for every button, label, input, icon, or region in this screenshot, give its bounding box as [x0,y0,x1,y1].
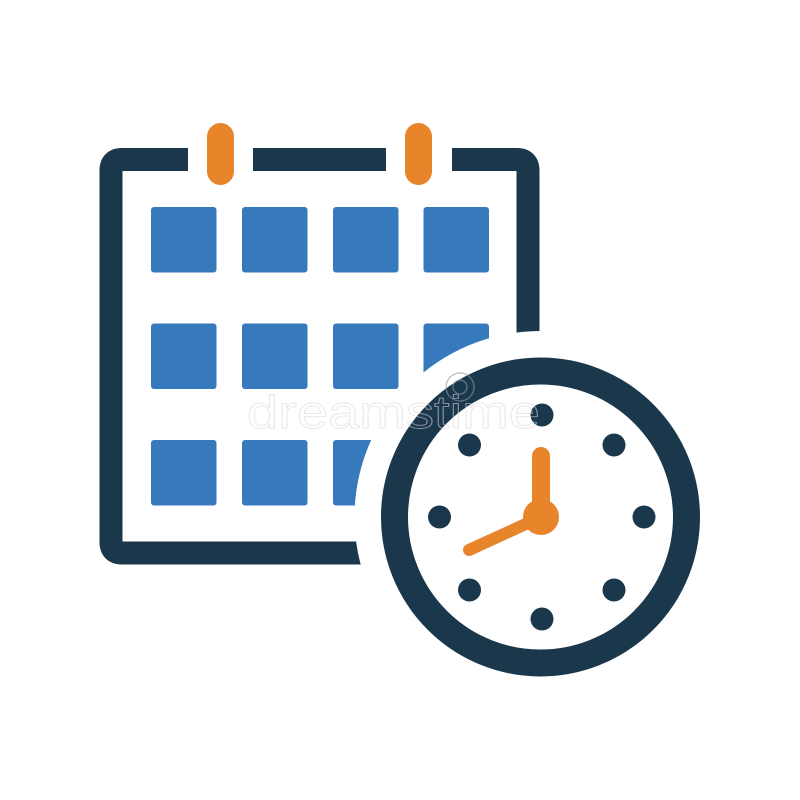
clock cutout [354,331,726,703]
icon: calendar binder rings [207,123,432,185]
calendar day grid [151,207,489,506]
clock hour markers [428,404,656,630]
watermark [247,373,540,438]
clock hands [469,456,559,550]
icon: calendar frame [111,160,528,553]
watermark: dreamstime [247,386,540,438]
icon: clock face [394,371,686,663]
